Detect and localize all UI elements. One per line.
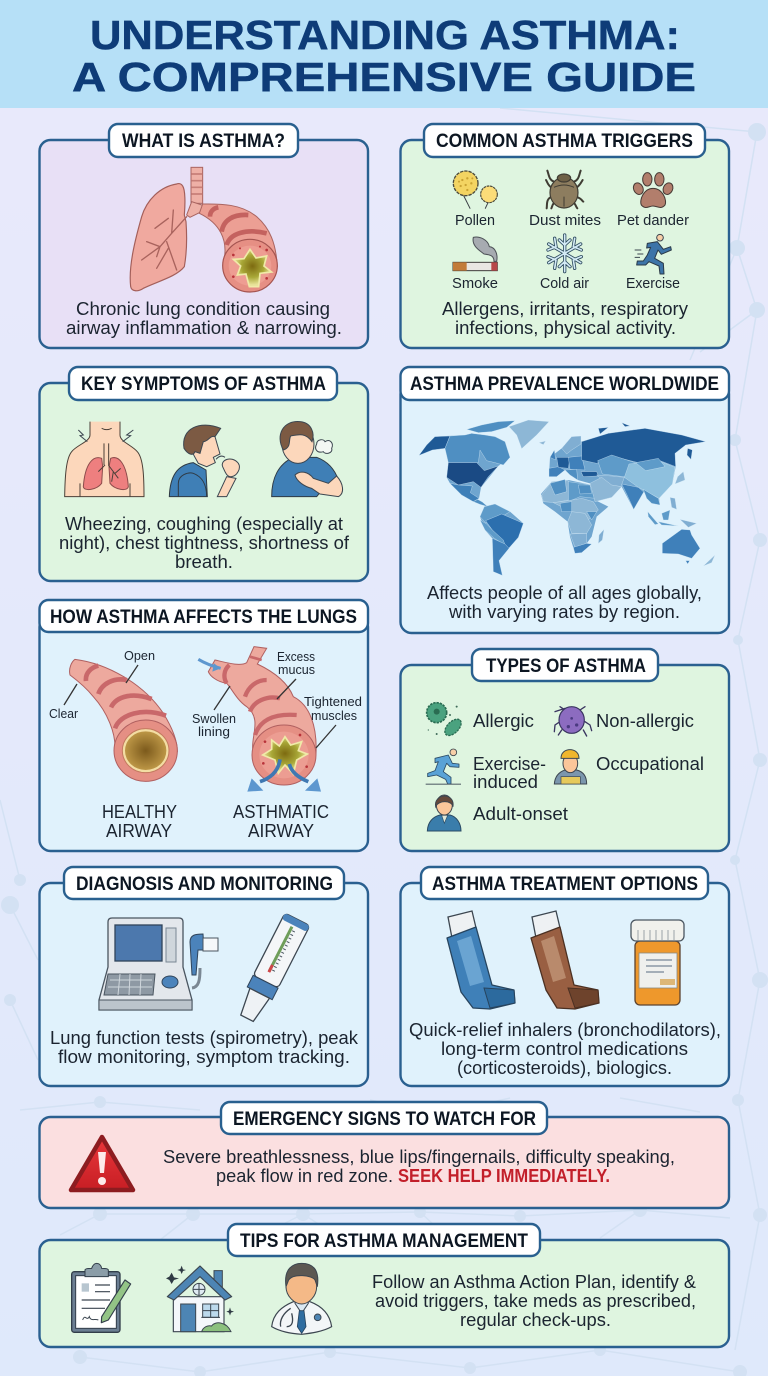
icons: trigger icons: [453, 171, 675, 274]
description: [442, 298, 689, 338]
heading: what is asthma: WHAT IS ASTHMA?: [122, 130, 285, 152]
heading: diagnosis: DIAGNOSIS AND MONITORING: [76, 873, 333, 895]
warning text: [163, 1146, 675, 1186]
labels: asthmatic airway: Swollen: [192, 712, 236, 726]
description: [66, 298, 342, 338]
description: airway inflammation & narrowing.: [66, 317, 342, 338]
panel: common asthma triggers: [400, 124, 729, 348]
labels: asthmatic airway: ASTHMATIC: [233, 801, 329, 822]
trigger labels: Smoke: [452, 276, 498, 292]
icon: pill bottle: [631, 920, 684, 1005]
panel: how asthma affects the lungs: [40, 600, 368, 851]
icon: lungs with inflamed airway: [130, 167, 277, 292]
type labels: Non-allergic: [596, 710, 694, 731]
icon: peak flow meter: [235, 913, 310, 1025]
description: Wheezing, coughing (especially at: [65, 513, 343, 534]
panel: emergency signs: [40, 1102, 729, 1208]
description: flow monitoring, symptom tracking.: [58, 1046, 350, 1067]
diagram: healthy airway: [70, 659, 177, 781]
type labels: Adult-onset: [473, 803, 568, 824]
icon: person coughing: [169, 425, 239, 497]
labels: healthy airway: [49, 649, 177, 841]
description: Allergens, irritants, respiratory: [442, 298, 689, 319]
icon: exercise runner: [426, 749, 461, 785]
icon: person holding chest: [272, 422, 343, 497]
trigger labels: Pollen: [455, 213, 495, 229]
icons: types: [426, 703, 592, 831]
icons: symptoms: [65, 422, 343, 497]
icon: pollen: [453, 171, 497, 208]
trigger labels: Dust mites: [529, 213, 601, 229]
labels: asthmatic airway: mucus: [278, 663, 315, 677]
diagram: asthmatic airway: [198, 647, 321, 792]
type labels: Allergic: [473, 710, 534, 731]
heading: symptoms: [69, 367, 337, 400]
heading: tips: TIPS FOR ASTHMA MANAGEMENT: [240, 1230, 528, 1252]
icon: construction worker: [554, 750, 587, 784]
title: UNDERSTANDING ASTHMA:: [90, 12, 680, 58]
heading: types: TYPES OF ASTHMA: [486, 655, 646, 677]
type labels: Occupational: [596, 753, 704, 774]
warning text: SEEK HELP IMMEDIATELY.: [398, 1166, 610, 1186]
trigger labels: [452, 213, 689, 292]
icon: dust mite: [546, 171, 583, 208]
icon: snowflake: [548, 235, 581, 272]
heading: triggers: COMMON ASTHMA TRIGGERS: [436, 130, 693, 152]
type labels: Exercise-: [473, 753, 546, 774]
description: [59, 513, 350, 572]
heading: lungs: [40, 600, 368, 632]
labels: healthy airway: Open: [124, 649, 155, 663]
heading: symptoms: KEY SYMPTOMS OF ASTHMA: [81, 373, 326, 395]
trigger labels: Pet dander: [617, 213, 689, 229]
tips text: [372, 1271, 697, 1330]
heading: emergency: [221, 1102, 547, 1134]
icon: blue inhaler: [447, 911, 515, 1009]
description: breath.: [175, 551, 233, 572]
description: [409, 1019, 721, 1078]
icon: warning triangle: [71, 1137, 133, 1190]
description: infections, physical activity.: [455, 317, 676, 338]
warning text: Severe breathlessness, blue lips/fingernails, difficulty speaking,: [163, 1146, 675, 1167]
heading: emergency: EMERGENCY SIGNS TO WATCH FOR: [233, 1108, 536, 1130]
icons: tips: [72, 1263, 332, 1334]
header banner: [0, 0, 768, 108]
description: Lung function tests (spirometry), peak: [50, 1027, 359, 1048]
description: Chronic lung condition causing: [76, 298, 330, 319]
icon: doctor: [272, 1263, 332, 1334]
trigger labels: Cold air: [540, 276, 589, 292]
description: night), chest tightness, shortness of: [59, 532, 350, 553]
description: with varying rates by region.: [448, 601, 680, 622]
heading: triggers: [424, 124, 705, 157]
labels: healthy airway: HEALTHY: [102, 801, 177, 822]
title: A COMPREHENSIVE GUIDE: [72, 54, 696, 100]
icon: cigarette: [453, 237, 497, 271]
labels: asthmatic airway: Excess: [277, 650, 315, 664]
icon: brown inhaler: [531, 911, 599, 1009]
type labels: induced: [473, 771, 538, 792]
panel: diagnosis and monitoring: [40, 867, 368, 1086]
labels: healthy airway: Clear: [49, 707, 78, 721]
type labels: [473, 710, 704, 824]
heading: what is asthma: [109, 124, 298, 157]
heading: diagnosis: [64, 867, 344, 899]
heading: prevalence: ASTHMA PREVALENCE WORLDWIDE: [410, 373, 719, 395]
title: [72, 12, 696, 100]
icon: adult person: [427, 795, 461, 831]
heading: types: [472, 649, 658, 681]
description: [427, 582, 702, 622]
heading: tips: [228, 1224, 540, 1256]
panel: prevalence worldwide: [400, 367, 729, 633]
heading: treatment: [421, 867, 708, 899]
icon: spirometer: [99, 918, 218, 1010]
icon: clean house: [166, 1266, 234, 1332]
icon: non-allergic mite: [554, 707, 592, 736]
description: Quick-relief inhalers (bronchodilators),: [409, 1019, 721, 1040]
warning text: peak flow in red zone.: [216, 1165, 393, 1186]
heading: prevalence: [400, 367, 729, 400]
labels: healthy airway: AIRWAY: [106, 820, 172, 841]
panel: what is asthma: [40, 124, 368, 348]
tips text: Follow an Asthma Action Plan, identify &: [372, 1271, 697, 1292]
trigger labels: Exercise: [626, 276, 680, 292]
description: Affects people of all ages globally,: [427, 582, 702, 603]
icon: pet paw: [632, 173, 675, 208]
description: [50, 1027, 359, 1067]
icon: allergic microbes: [427, 703, 464, 738]
panel: management tips: [40, 1224, 729, 1347]
tips text: avoid triggers, take meds as prescribed,: [375, 1290, 696, 1311]
panel: key symptoms: [40, 367, 368, 581]
labels: asthmatic airway: muscles: [311, 709, 357, 723]
labels: asthmatic airway: [192, 650, 362, 841]
labels: asthmatic airway: lining: [198, 725, 230, 739]
heading: treatment: ASTHMA TREATMENT OPTIONS: [432, 873, 698, 895]
panel: types of asthma: [400, 649, 729, 851]
heading: lungs: HOW ASTHMA AFFECTS THE LUNGS: [50, 606, 357, 628]
description: (corticosteroids), biologics.: [457, 1057, 672, 1078]
panel: treatment options: [400, 867, 729, 1086]
labels: asthmatic airway: AIRWAY: [248, 820, 314, 841]
labels: asthmatic airway: Tightened: [304, 695, 362, 709]
tips text: regular check-ups.: [460, 1309, 611, 1330]
icon: clipboard: [72, 1263, 131, 1332]
icon: chest with lungs: [65, 422, 144, 497]
description: long-term control medications: [441, 1038, 688, 1059]
world map: [419, 420, 715, 575]
icon: runner: [635, 234, 671, 274]
